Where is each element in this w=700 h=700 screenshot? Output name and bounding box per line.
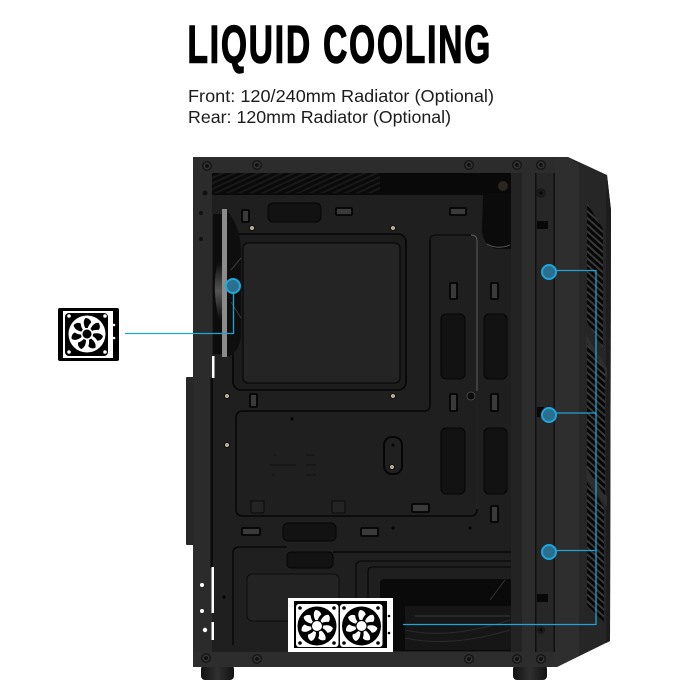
top interior vent [212,173,511,195]
callout: rear radiator [125,279,240,334]
rear corner opening [482,181,511,249]
bottom frame [193,652,555,667]
tabs [251,501,345,513]
subtitle text: Rear: 120mm Radiator (Optional) [188,107,451,127]
PSU bay window [380,579,511,651]
mounting holes and markings [222,417,472,599]
callout markers: front radiator [542,265,556,559]
cable grommet [384,437,402,474]
front vents [587,203,605,622]
PC case [186,157,611,680]
rear fan and radiator [213,209,241,357]
icon: dual 240mm radiator [288,598,393,652]
subtitle text [188,86,494,127]
case feet [201,665,547,680]
cutouts and slots [268,203,507,568]
icon: single 120mm radiator [58,308,119,361]
left bracket [186,377,194,545]
subtitle text: Front: 120/240mm Radiator (Optional) [188,86,494,106]
side column [511,157,555,667]
top frame [193,157,555,173]
small slots [242,208,498,536]
back panel [212,173,511,653]
title: LIQUID COOLING [188,16,492,74]
left frame [193,157,214,667]
right front panel body [555,157,611,667]
frame screws [201,160,546,664]
standoffs [224,225,396,470]
panel outlines [236,235,477,516]
PSU shroud [233,547,511,652]
callout lines: front radiator [403,270,596,624]
upper motherboard cutout [233,234,406,390]
